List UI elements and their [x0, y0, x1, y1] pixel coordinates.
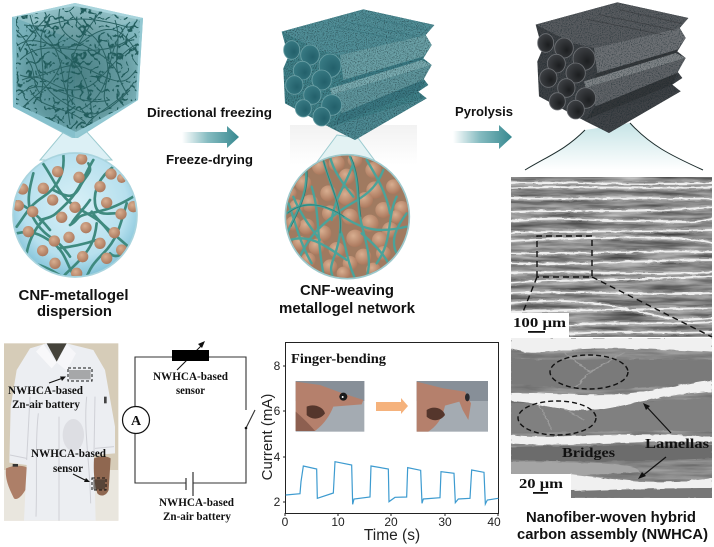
x-axis title: Time (s) — [364, 527, 420, 544]
icon: ammeter — [122, 406, 150, 434]
y-axis tick labels: 2 — [274, 495, 281, 509]
x-axis tick labels: 30 — [438, 515, 452, 529]
callout: battery location on coat: Zn-air battery — [12, 399, 80, 411]
heading: CNF-weaving metallogel network: CNF-weaving — [300, 283, 394, 299]
heading: Nanofiber-woven hybrid carbon assembly: Nanofiber-woven hybrid — [526, 510, 696, 526]
heading: Finger-bending: Finger-bending — [291, 351, 386, 366]
icon: magnified fibers and metal beads — [13, 153, 139, 280]
chart frame and ticks — [283, 342, 498, 516]
x-axis tick labels: 20 — [384, 515, 398, 529]
arrow: pyrolysis step — [453, 105, 513, 149]
callout: sensor location on hand: sensor — [53, 463, 83, 475]
arrow: freezing step: Freeze-drying — [166, 153, 253, 167]
icon: funnel from structure to micrographs — [525, 123, 703, 170]
heading: Nanofiber-woven hybrid carbon assembly: carbon assembly (NWHCA) — [517, 527, 708, 543]
label: NWHCA-based Zn-air battery — [159, 497, 235, 523]
callout: battery location on coat — [8, 368, 92, 411]
photo illustration: person in white coat — [4, 343, 118, 521]
panel: finger-bending current chart — [259, 342, 501, 544]
x-axis tick labels: 10 — [331, 515, 345, 529]
circuit wires — [135, 357, 246, 483]
panel: CNF-weaving metallogel network — [279, 9, 434, 317]
annotation: dashed ellipses on bridges — [518, 355, 628, 435]
scale label: 100 μm: 100 μm — [513, 316, 566, 331]
line chart: current trace — [286, 462, 498, 504]
icon: zoom funnel to lens — [317, 135, 378, 165]
icon: dark carbon honeycomb structure — [536, 2, 688, 133]
arrow: freezing step: Directional freezing — [147, 106, 272, 120]
label: Lamellas with arrows: Lamellas — [645, 437, 710, 452]
icon: battery — [186, 472, 193, 496]
heading: CNF-metallogel dispersion — [18, 288, 128, 320]
x-axis tick labels: 40 — [487, 515, 501, 529]
panel: CNF-metallogel dispersion — [12, 3, 143, 320]
heading: CNF-weaving metallogel network: metallogel network — [279, 301, 416, 317]
y-axis title: Current (mA) — [259, 394, 276, 480]
backdrop behind zoom funnel — [290, 125, 417, 165]
label: Bridges: Bridges — [562, 446, 616, 461]
x-axis tick labels: 0 — [282, 515, 289, 529]
label: NWHCA-based Zn-air battery: NWHCA-based — [159, 497, 235, 509]
callout: sensor location on hand — [31, 448, 107, 490]
y-axis tick labels: 4 — [274, 450, 281, 464]
label: NWHCA-based sensor: sensor — [176, 385, 205, 397]
label: NWHCA-based sensor: NWHCA-based — [153, 371, 229, 383]
icon: ammeter: A — [131, 414, 142, 429]
callout: selected region dashed box — [523, 236, 712, 337]
label: NWHCA-based sensor — [153, 371, 229, 397]
y-axis tick labels: 6 — [274, 404, 281, 418]
arrow: freezing step — [147, 106, 272, 167]
scale bar box — [511, 313, 569, 338]
panel: circuit diagram — [122, 341, 255, 523]
callout: sensor location on hand: NWHCA-based — [31, 448, 107, 460]
panel: wearable lab coat photo — [4, 343, 118, 521]
label: NWHCA-based Zn-air battery: Zn-air battery — [163, 511, 231, 523]
photo: straight finger — [296, 381, 364, 432]
y-axis tick labels: 8 — [274, 359, 281, 373]
scale bar box — [511, 474, 571, 498]
icon: teal honeycomb structure — [282, 9, 434, 140]
panel: carbon assembly — [511, 2, 712, 543]
icon: switch — [245, 410, 255, 429]
icon: gel cube with tangled fibers — [12, 3, 143, 138]
arrow: pyrolysis step: Pyrolysis — [455, 105, 513, 119]
icon: variable resistor sensor — [172, 341, 209, 370]
y-axis tick labels — [274, 359, 281, 509]
heading: Nanofiber-woven hybrid carbon assembly — [517, 510, 708, 543]
callout: battery location on coat: NWHCA-based — [8, 385, 84, 397]
heading: CNF-weaving metallogel network — [279, 283, 416, 317]
scale label: 20 μm: 20 μm — [519, 477, 563, 492]
x-axis tick labels — [282, 515, 501, 529]
icon: zoom funnel to lens — [40, 122, 112, 160]
arrow: orange bending transition — [376, 398, 408, 414]
micrograph: magnified lamellas and bridges — [511, 338, 712, 498]
heading: CNF-metallogel dispersion: dispersion — [37, 304, 112, 320]
micrograph: lamellar overview — [511, 177, 712, 338]
icon: magnified woven fibers and beads — [283, 153, 409, 280]
photo: bent finger — [417, 381, 488, 432]
heading: CNF-metallogel dispersion: CNF-metallogel — [18, 288, 128, 304]
label: Lamellas with arrows — [638, 403, 710, 479]
